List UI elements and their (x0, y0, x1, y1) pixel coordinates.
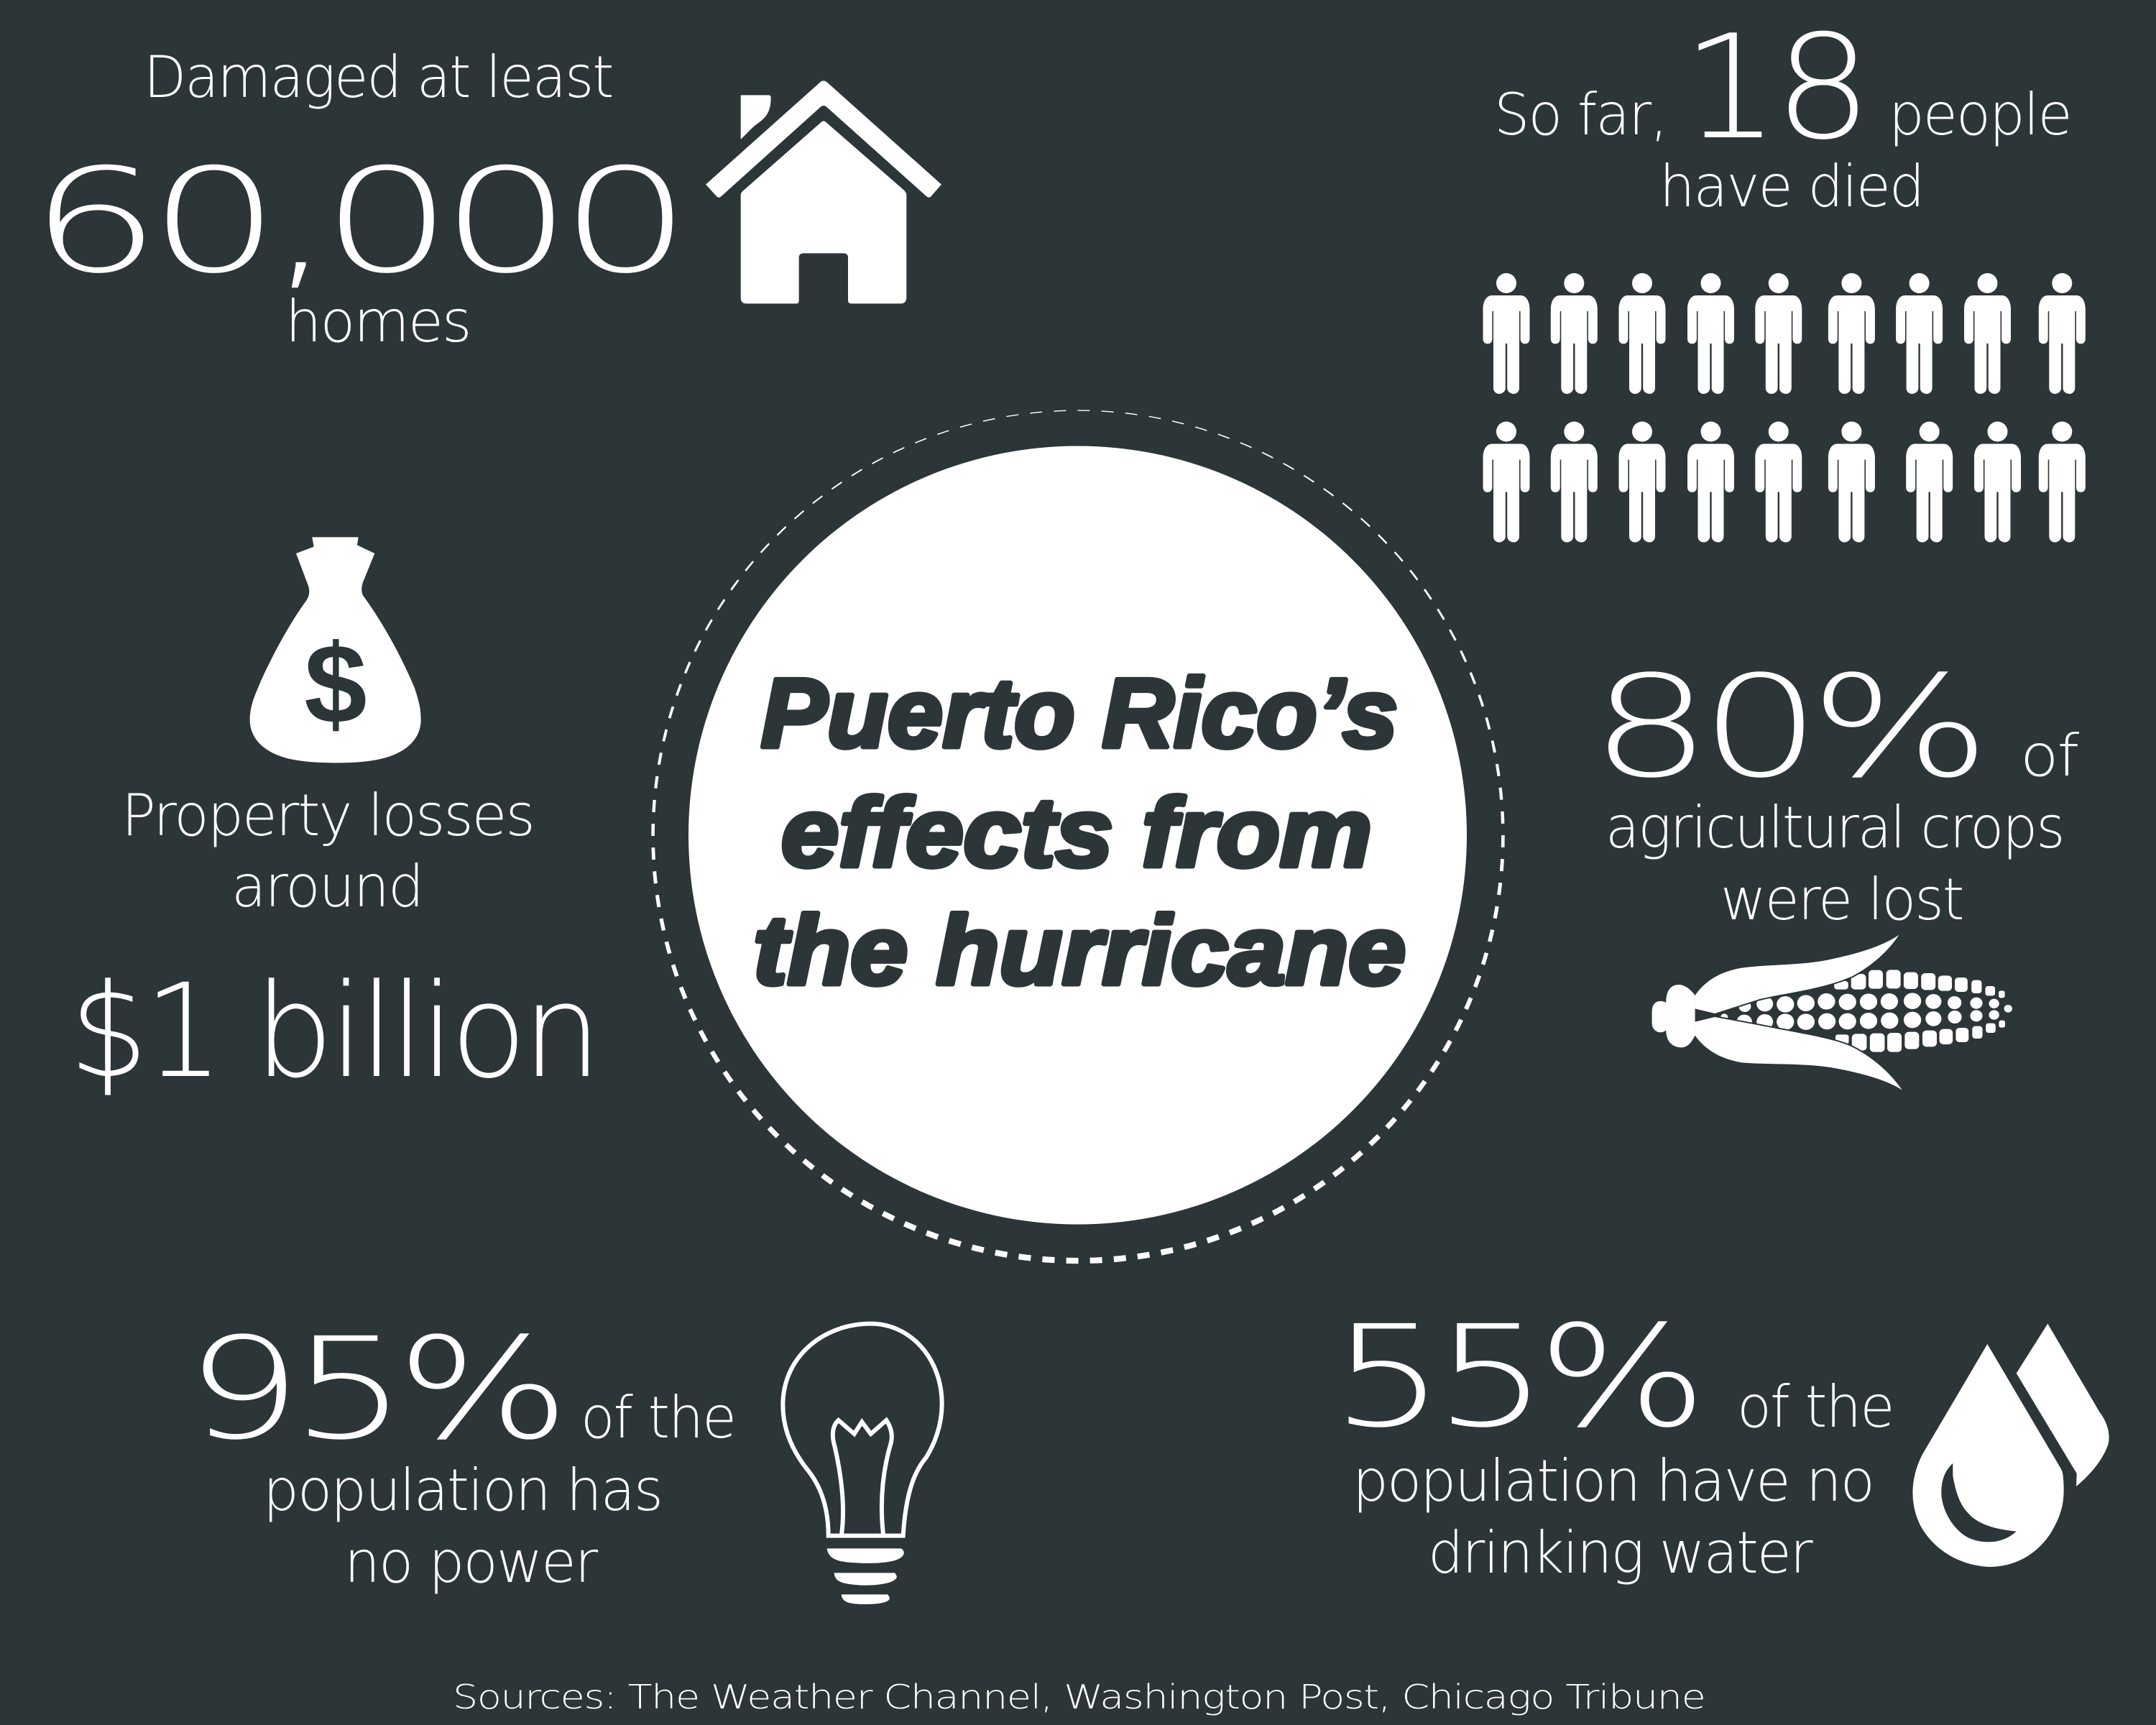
icon: corn (1652, 935, 2012, 1090)
panel: deaths (1483, 4, 2086, 542)
panel: no drinking water (1331, 1296, 2109, 1586)
text: homes: homes (285, 289, 470, 355)
text: around: around (231, 854, 423, 920)
number: 95%: 95% (185, 1308, 559, 1471)
text: property losses: Property losses (121, 783, 534, 849)
icon: second row of nine people (1483, 421, 2086, 542)
panel: property losses (69, 537, 597, 1107)
outer dashed ring (651, 410, 1505, 1264)
number: 80%: 80% (1590, 646, 1979, 809)
title: the hurricane (753, 896, 1406, 1005)
text: population have no: population have no (1353, 1448, 1874, 1514)
title: Puerto Rico’s (761, 658, 1398, 768)
text: drinking water: drinking water (1428, 1520, 1813, 1586)
icon: light bulb (783, 1324, 942, 1604)
text: people: people (1889, 82, 2071, 148)
sources: Sources: The Weather Channel, Washington Post, Chicago Tribune (453, 1678, 1705, 1716)
panel: no power (185, 1308, 942, 1604)
number: 60,000: 60,000 (29, 137, 679, 305)
text: so far: So far, (1494, 82, 1667, 148)
text: population has: population has (263, 1458, 662, 1524)
panel: crops lost (1590, 646, 2079, 1090)
text: damaged at least: Damaged at least (144, 45, 612, 111)
icon: money bag: $ (304, 622, 367, 748)
panel: homes damaged (29, 45, 941, 355)
text: of: of (2020, 723, 2079, 789)
number: $1 billion: $1 billion (69, 957, 597, 1107)
panel: center title circle (651, 410, 1505, 1264)
icon: money bag (250, 537, 421, 763)
text: of the: of the (581, 1385, 735, 1451)
icon: house (706, 80, 941, 303)
text: of the: of the (1737, 1374, 1893, 1440)
title: effects from (781, 778, 1372, 887)
text: no power: no power (344, 1530, 599, 1596)
number: 55%: 55% (1331, 1296, 1697, 1458)
white circle (688, 446, 1467, 1225)
text: were lost: were lost (1720, 867, 1963, 933)
text: have died: have died (1659, 154, 1923, 220)
title (753, 658, 1406, 1005)
icon: row of nine people (1483, 273, 2086, 394)
number: 18: 18 (1682, 4, 1867, 172)
icon: water drops (1912, 1324, 2109, 1567)
